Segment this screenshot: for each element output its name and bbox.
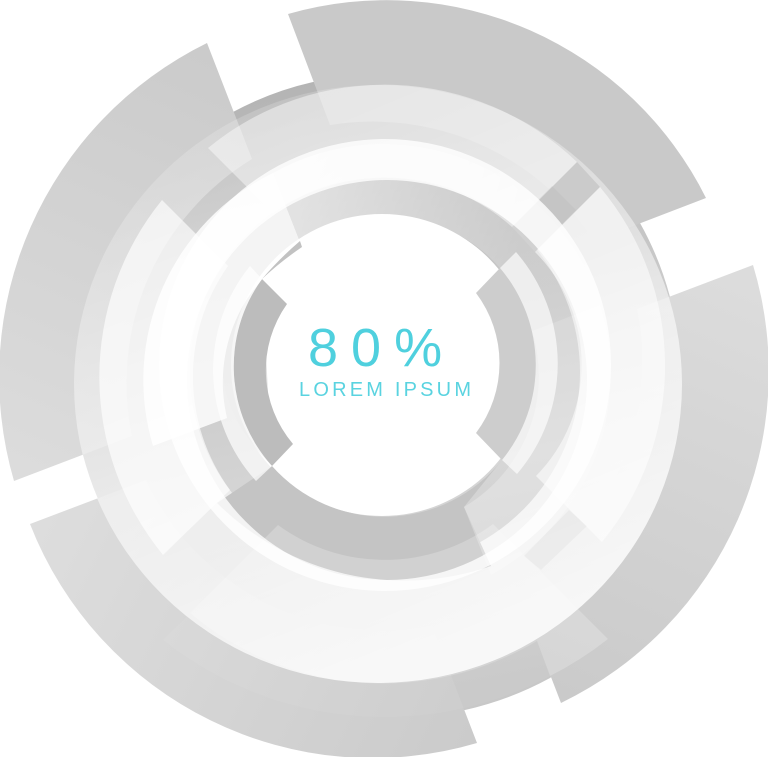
outer arc: top right xyxy=(288,0,706,241)
top light arc xyxy=(208,85,577,227)
middle ring: right xyxy=(464,305,611,575)
north-east gap inner shade xyxy=(538,186,576,225)
translucent main disc xyxy=(74,85,682,683)
left inner dark segment xyxy=(234,279,293,466)
thin crescent near top inner segment xyxy=(262,241,302,279)
outer arc: right xyxy=(516,265,768,703)
south-east gap shade xyxy=(524,510,587,570)
right inner segment xyxy=(476,268,536,460)
inner tip: right xyxy=(500,252,558,474)
centre value: 80% xyxy=(308,318,455,378)
bottom light arc xyxy=(190,524,608,683)
outer arc: left xyxy=(0,43,252,481)
north-east gap between arcs xyxy=(512,162,600,252)
left inner lens xyxy=(223,280,272,466)
inner tip: left xyxy=(213,266,272,481)
bottom faint arc beyond disc xyxy=(163,613,550,717)
bright full ring xyxy=(159,139,611,591)
bottom dark segment xyxy=(217,460,502,581)
outer arc: bottom xyxy=(30,480,477,757)
centre label: LOREM IPSUM xyxy=(299,379,471,401)
right light arc xyxy=(535,187,665,542)
left light arc xyxy=(99,200,230,555)
middle ring: top xyxy=(273,144,600,331)
middle ring: left xyxy=(143,173,302,446)
base dark ring xyxy=(75,76,690,716)
